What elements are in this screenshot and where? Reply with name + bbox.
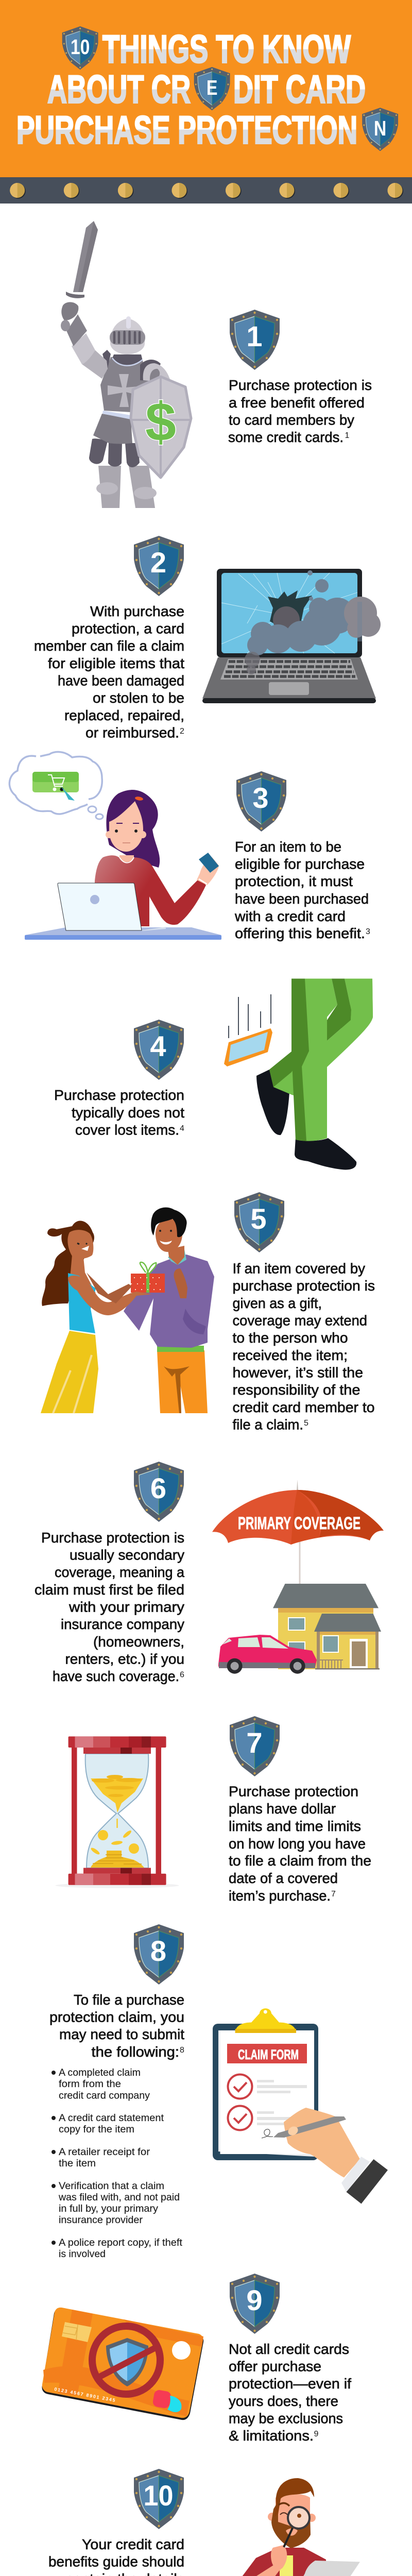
text: fact 4: Purchase protection [54,1087,184,1103]
fact 9 [229,2274,351,2444]
badge: 5: 5 [250,1202,267,1235]
title shield: E [194,67,230,110]
text: fact 2: or reimbursed. [85,725,179,741]
bullet list: documents to submit: credit card company [59,2090,150,2101]
fact 10 [43,2469,184,2576]
illustration: legs dropping phone [224,979,373,1170]
bullet list: documents to submit: A police report copy, if theft [59,2237,183,2248]
title [16,26,398,152]
bullet list: documents to submit: in full by, your primary [59,2203,158,2214]
car [218,1635,317,1674]
crossed-out shield [92,2326,160,2394]
bullet list: documents to submit: A completed claim [59,2067,141,2078]
thought bubble [9,752,103,819]
badge: 1: 1 [246,320,263,352]
laptop back [58,883,142,930]
illustration: broken laptop with smoke [202,569,381,703]
card number: 0123 4567 8901 2345 [54,2386,115,2403]
text: fact 1: 1 [345,431,349,440]
illustration: credit card with crossed-out shield [42,2308,203,2420]
text: fact 8: the following: [92,2044,179,2060]
illustration: knight with shield [61,221,191,508]
badge: 9 [230,2274,280,2334]
illustration: hourglass with coins [56,1736,179,1888]
bullet list: documents to submit: is involved [59,2248,106,2260]
bullet list: documents to submit: copy for the item [59,2124,134,2135]
text: fact 3: have been purchased [235,891,369,907]
text: fact 6: have such coverage. [53,1668,179,1684]
text: fact 9: Not all credit cards [229,2341,349,2357]
badge: 8 [134,1924,184,1985]
text: fact 2: member can file a claim [34,638,184,654]
text: fact 3: For an item to be [235,839,341,855]
fact 2 [34,536,184,741]
text: fact 3: 3 [366,927,370,936]
text: fact 5: given as a gift, [233,1295,322,1311]
text: fact 5: received the item; [233,1347,348,1363]
text: fact 7: Purchase protection [229,1784,358,1800]
text: fact 9: & limitations. [229,2428,314,2444]
text: fact 7: limits and time limits [229,1818,361,1834]
house [273,1584,381,1669]
phone [224,1028,272,1066]
text: fact 6: insurance company [61,1616,184,1632]
text: fact 1: Purchase protection is [229,377,372,393]
icon: dollar sign: $ [145,392,176,452]
fact 5 [233,1192,375,1432]
text: fact 10: Your credit card [82,2536,184,2552]
magnifying glass [284,2507,310,2547]
illustration: umbrella over house and car [212,1480,384,1674]
text: fact 6: renters, etc.) if you [65,1651,184,1667]
fact 7 [229,1716,371,1904]
title shield: E: E [207,76,217,99]
text: fact 10: benefits guide should [48,2554,184,2570]
illustration: claim form on clipboard with signing hand [213,2008,388,2204]
text: fact 2: protection, a card [72,621,184,637]
fact 8 [49,1924,184,2260]
text: fact 6: with your primary [68,1599,184,1615]
illustration: woman shopping online with card [9,752,221,940]
title shield: 10 [62,26,98,70]
illustration: couple exchanging gift [41,1208,214,1413]
text: fact 7: to file a claim from the [229,1853,371,1869]
badge: 10 [134,2469,184,2529]
header band [0,0,412,177]
badge: 5 [234,1192,284,1252]
text: fact 9: 9 [314,2430,318,2438]
text: fact 8: protection claim, you [49,2009,184,2025]
text: fact 7: 7 [331,1890,336,1899]
text: fact 5: purchase protection is [233,1278,375,1294]
badge: 4 [134,1020,184,1080]
badge: 3 [236,771,286,832]
text: fact 2: With purchase [90,603,184,619]
bullet list: documents to submit [52,2067,183,2260]
bullet list: documents to submit: was filed with, and not paid [58,2192,180,2203]
text: fact 6: Purchase protection is [41,1530,184,1546]
title shield: 10: 10 [71,35,90,59]
text: fact 3: protection, it must [235,873,353,889]
text: fact 1: to card members by [229,412,354,428]
badge: 8: 8 [150,1935,166,1967]
illustration: claim form on clipboard with signing hand: CLAIM FORM [238,2047,299,2062]
bullet list: documents to submit: the item [59,2158,96,2169]
text: fact 5: credit card member to [233,1399,375,1415]
text: fact 5: responsibility of the [233,1382,360,1398]
badge: 2: 2 [150,546,166,579]
text: fact 5: to the person who [233,1330,348,1346]
badge: 4: 4 [150,1030,166,1062]
text: fact 5: 5 [304,1419,308,1428]
text: fact 6: (homeowners, [93,1634,184,1650]
bullet list: documents to submit: A credit card statement [59,2112,164,2124]
badge: 7 [230,1716,280,1776]
text: fact 2: have been damaged [58,673,184,689]
badge: 10: 10 [143,2479,173,2512]
title shield: N [362,108,398,151]
text: fact 6: 6 [180,1670,184,1680]
studded bar: top [0,177,412,204]
text: fact 2: replaced, repaired, [64,707,184,723]
title shield: N: N [374,116,386,140]
text: fact 5: If an item covered by [233,1260,365,1276]
text: fact 4: typically does not [72,1105,184,1121]
text: fact 6: coverage, meaning a [55,1564,185,1580]
text: fact 4: cover lost items. [75,1122,179,1138]
title: ABOUT CR [47,68,191,111]
text: fact 5: however, it’s still the [233,1364,363,1381]
bullet list: documents to submit: insurance provider [59,2214,143,2226]
text: fact 1: some credit cards. [228,429,344,445]
man [157,1350,208,1413]
text: fact 9: yours does, there [229,2393,338,2409]
text: fact 9: protection—even if [229,2376,351,2392]
badge: 1 [230,310,280,370]
text: fact 2: for eligible items that [48,655,184,671]
form banner [227,2044,307,2063]
text: fact 1: a free benefit offered [229,395,365,411]
text: fact 7: plans have dollar [229,1801,336,1817]
fact 3 [234,771,370,941]
text: fact 8: 8 [180,2046,184,2055]
text: fact 3: with a credit card [234,908,346,924]
text: fact 2: 2 [180,727,184,736]
text: fact 6: usually secondary [70,1547,184,1563]
text: fact 7: item’s purchase. [229,1888,331,1904]
illustration: bearded man with magnifier and document [227,2478,360,2576]
gift box [131,1262,166,1293]
text: fact 3: eligible for purchase [235,856,365,872]
badge: 2 [134,536,184,596]
fact 4 [54,1020,184,1138]
bullet list: documents to submit: A retailer receipt for [59,2146,150,2158]
fact 1 [228,310,372,445]
text: fact 3: offering this benefit. [235,925,365,941]
fact 6 [35,1462,185,1684]
badge: 6 [134,1462,184,1522]
text: fact 5: coverage may extend [233,1312,367,1328]
text: fact 7: date of a covered [229,1870,338,1886]
text: fact 9: offer purchase [229,2359,321,2375]
text: fact 4: 4 [180,1124,184,1133]
text: fact 7: on how long you have [229,1836,366,1852]
badge: 7: 7 [246,1726,263,1759]
text: fact 6: claim must first be filed [35,1582,184,1598]
bullet list: documents to submit: form from the [59,2078,121,2090]
text: fact 8: To file a purchase [74,1992,184,2008]
badge: 9: 9 [246,2284,263,2316]
bullet list: documents to submit: Verification that a claim [59,2180,164,2192]
text: fact 9: may be exclusions [229,2411,343,2427]
text: fact 2: or stolen to be [93,690,184,706]
text: fact 5: file a claim. [233,1417,303,1432]
badge: 3: 3 [252,782,269,814]
text: fact 8: may need to submit [59,2026,184,2042]
badge: 6: 6 [150,1472,166,1504]
checklist [228,2074,307,2138]
